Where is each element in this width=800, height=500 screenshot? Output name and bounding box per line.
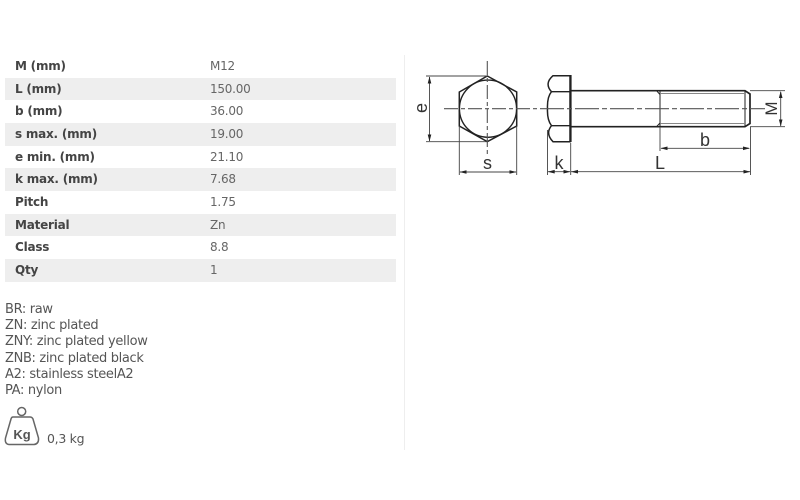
dimension: L: L xyxy=(655,153,665,173)
row: class xyxy=(15,240,228,254)
row: class: Class xyxy=(15,240,49,254)
row: L: 150.00 xyxy=(210,82,250,96)
row: qty: 1 xyxy=(210,263,217,277)
row: M: M (mm) xyxy=(15,59,66,73)
row: class: 8.8 xyxy=(210,240,228,254)
row: e min: 21.10 xyxy=(210,150,243,164)
row: k max xyxy=(5,168,396,191)
row: pitch: 1.75 xyxy=(210,195,236,209)
dimension: b xyxy=(660,127,750,151)
dimension: e xyxy=(411,76,487,142)
row: s max: s max. (mm) xyxy=(15,127,97,141)
material legend: ZN: zinc plated xyxy=(5,318,98,333)
row: b: 36.00 xyxy=(210,104,243,118)
row: b xyxy=(15,104,243,118)
row: s max: 19.00 xyxy=(210,127,243,141)
row: b: b (mm) xyxy=(15,104,62,118)
material legend: ZNY: zinc plated yellow xyxy=(5,334,148,349)
row: pitch: Pitch xyxy=(15,195,48,209)
dimension: b: b xyxy=(700,130,710,150)
material legend: PA: nylon xyxy=(5,383,62,398)
material legend: ZNB: zinc plated black xyxy=(5,351,144,366)
row: M: M12 xyxy=(210,59,235,73)
row: M xyxy=(15,59,235,73)
dimension: s: s xyxy=(483,153,492,173)
icon: weight xyxy=(4,406,40,446)
row: e min: e min. (mm) xyxy=(15,150,95,164)
row: qty: Qty xyxy=(15,263,38,277)
row: material xyxy=(5,214,396,236)
side view: bolt xyxy=(540,75,765,142)
dimension: k xyxy=(548,130,571,175)
dimension: L xyxy=(571,127,750,175)
row: L xyxy=(5,78,396,100)
specification table xyxy=(5,59,396,282)
dimension: s xyxy=(459,126,517,175)
row: k max: k max. (mm) xyxy=(15,172,98,186)
dimension: k: k xyxy=(554,153,564,173)
dimension: e: e xyxy=(411,103,431,113)
row: material: Zn xyxy=(210,218,225,232)
dimension: M: M xyxy=(762,101,781,116)
material legend: BR: raw xyxy=(5,302,53,317)
row: e min xyxy=(15,150,243,164)
row: k max: 7.68 xyxy=(210,172,236,186)
row: qty xyxy=(5,259,396,282)
icon: weight: Kg xyxy=(13,427,31,442)
row: material: Material xyxy=(15,218,69,232)
material legend xyxy=(5,302,148,398)
row: pitch xyxy=(15,195,236,209)
divider xyxy=(404,55,405,450)
front view: hexagon head xyxy=(444,61,540,157)
material legend: A2: stainless steelA2 xyxy=(5,367,133,382)
row: s max xyxy=(5,123,396,146)
dimension: M xyxy=(750,91,785,127)
row: L: L (mm) xyxy=(15,82,61,96)
weight value: 0,3 kg xyxy=(47,431,84,446)
